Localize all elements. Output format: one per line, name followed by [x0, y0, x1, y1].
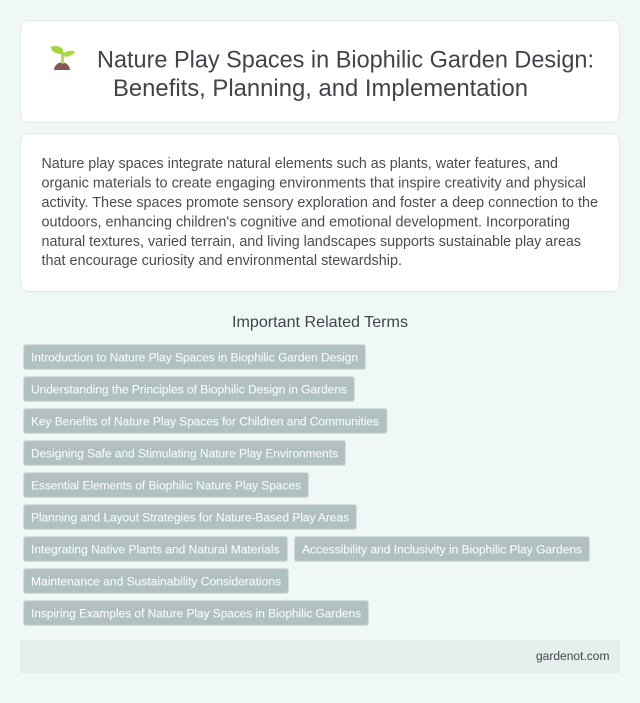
footer source text: gardenot.com — [536, 649, 610, 663]
description text: Nature play spaces integrate natural elements such as plants, water features, and — [42, 156, 558, 172]
description text: organic materials to create engaging environments that inspire creativity and physical — [42, 176, 586, 192]
panel: title card — [20, 20, 620, 122]
tag — [24, 408, 387, 434]
tag — [24, 536, 288, 562]
tag: Planning and Layout Strategies for Nature-Based Play Areas — [31, 510, 349, 524]
title: Benefits, Planning, and Implementation — [113, 75, 528, 102]
description text: natural textures, varied terrain, and living landscapes supports sustainable play areas — [42, 234, 581, 250]
tag — [294, 536, 590, 562]
title: Nature Play Spaces in Biophilic Garden Design: — [97, 46, 594, 74]
tag: Understanding the Principles of Biophilic Design in Gardens — [31, 382, 347, 396]
tag list — [24, 344, 590, 626]
footer — [20, 640, 620, 673]
tag — [24, 568, 288, 594]
tag — [24, 472, 308, 498]
description text: outdoors, enhancing children's cognitive and emotional development. Incorporating — [42, 214, 570, 230]
heading: important related terms: Important Related Terms — [232, 314, 408, 331]
tag: Essential Elements of Biophilic Nature Play Spaces — [31, 478, 301, 492]
tag — [24, 376, 354, 402]
description text: activity. These spaces promote sensory exploration and foster a deep connection to the — [42, 195, 598, 211]
icon: seedling — [50, 46, 75, 70]
description text — [42, 156, 598, 269]
tag: Accessibility and Inclusivity in Biophilic Play Gardens — [302, 542, 582, 556]
tag — [24, 344, 366, 370]
title — [97, 46, 594, 102]
tag: Inspiring Examples of Nature Play Spaces in Biophilic Gardens — [31, 606, 361, 620]
tag — [24, 440, 346, 466]
tag: Introduction to Nature Play Spaces in Biophilic Garden Design — [31, 350, 358, 364]
description text: that encourage curiosity and environmental stewardship. — [42, 253, 402, 269]
tag: Integrating Native Plants and Natural Materials — [31, 542, 280, 556]
tag: Maintenance and Sustainability Considerations — [31, 574, 281, 588]
tag: Designing Safe and Stimulating Nature Play Environments — [31, 446, 338, 460]
panel: description — [20, 134, 620, 292]
tag — [24, 600, 368, 626]
tag: Key Benefits of Nature Play Spaces for Children and Communities — [31, 414, 379, 428]
tag — [24, 504, 356, 530]
